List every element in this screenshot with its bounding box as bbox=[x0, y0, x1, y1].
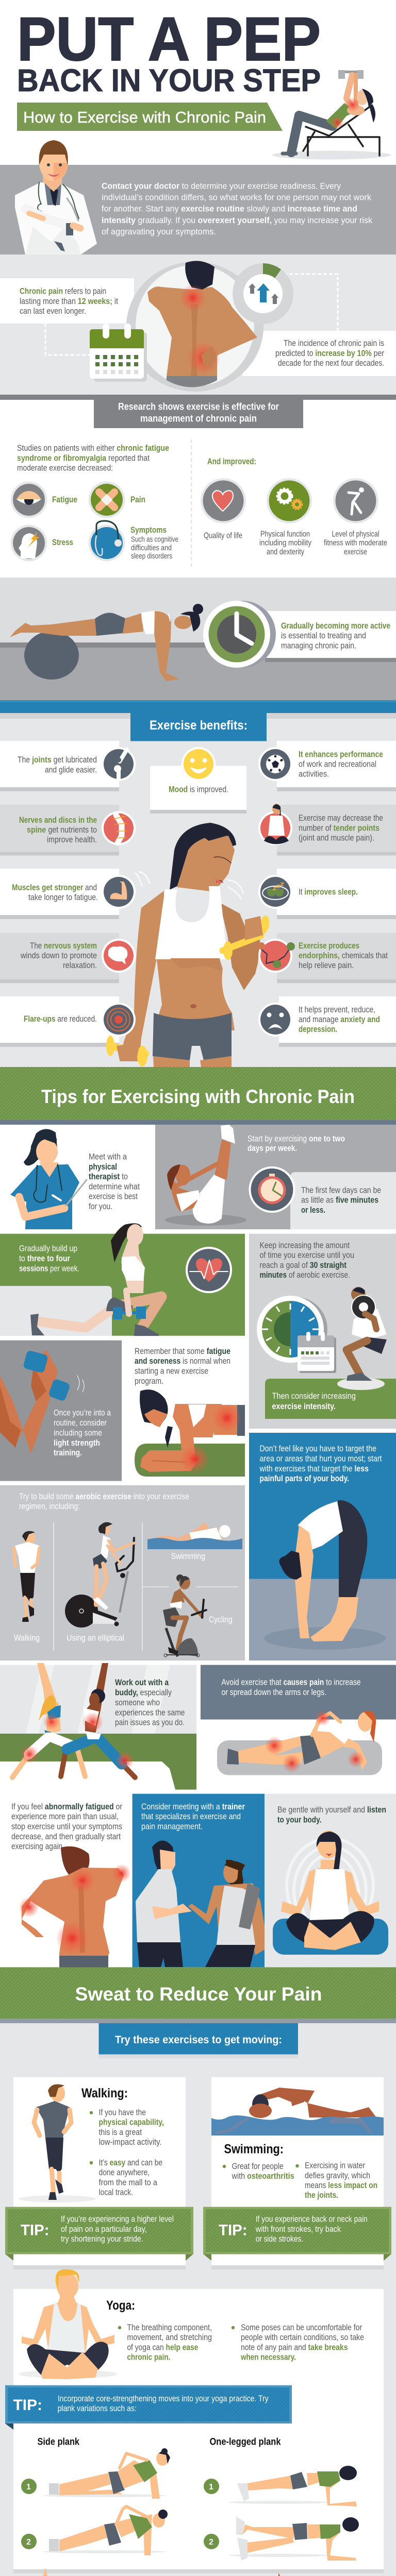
benefit: nerves and discs: Nerves and discs in the bbox=[19, 816, 97, 825]
illustration: squat man with weight bbox=[337, 1287, 387, 1390]
heading: side plank: Side plank bbox=[37, 2437, 79, 2447]
text: buddy: Work out with a bbox=[115, 1678, 169, 1687]
bullet: breathing: The breathing component, bbox=[127, 2323, 212, 2332]
text: aerobic intro: Try to build some aerobic exercise into your exercise bbox=[19, 1492, 189, 1501]
heading: research shows bbox=[94, 400, 303, 428]
text: symptoms: sleep disorders bbox=[131, 552, 172, 561]
label: swimming: Swimming bbox=[171, 1552, 205, 1561]
bullet: physical capability bbox=[90, 2108, 164, 2147]
illustration: swimmer bbox=[147, 1522, 242, 1549]
benefit: nervous system: The nervous system bbox=[30, 941, 97, 951]
benefit: mood bbox=[169, 747, 228, 794]
text: abnormally fatigued: decrease, and then gradually start bbox=[11, 1832, 121, 1841]
benefit: muscles: Muscles get stronger and bbox=[12, 883, 97, 892]
icon: spine bbox=[102, 811, 136, 845]
tip: 30 straight minutes bbox=[249, 1234, 396, 1429]
text: start by exercising bbox=[248, 1134, 345, 1153]
illustration: side plank step 1 bbox=[43, 2448, 170, 2499]
icon: heart bbox=[201, 478, 246, 523]
text: abnormally fatigued: If you feel abnormally fatigued or bbox=[11, 1802, 122, 1811]
text: physical therapist: determine what bbox=[89, 1182, 140, 1191]
illustration: lunge woman bbox=[30, 1223, 161, 1336]
text: remember: Remember that some fatigue bbox=[135, 1347, 230, 1356]
illustration: side plank with pain points bbox=[217, 1710, 382, 1775]
tip banner: swimming: or side strokes. bbox=[256, 2234, 303, 2244]
benefit: anxiety and depression: depression. bbox=[299, 1025, 337, 1034]
benefit: anxiety and depression: It helps prevent, reduce, bbox=[299, 1005, 375, 1014]
icon: soccer ball bbox=[258, 747, 292, 781]
bullet: easy: done anywhere, bbox=[99, 2168, 150, 2177]
text: remember bbox=[135, 1347, 230, 1386]
benefit: flare-ups bbox=[24, 1003, 136, 1037]
icon: stopwatch bbox=[249, 1166, 295, 1213]
text: trainer bbox=[141, 1802, 245, 1831]
tip: light strength training bbox=[0, 1341, 122, 1481]
icon: circle with rising arrows bbox=[233, 263, 293, 324]
text: light strength bbox=[54, 1409, 111, 1458]
icon: flexed arm bbox=[102, 875, 136, 909]
text: physical therapist bbox=[89, 1152, 140, 1211]
bullet: less impact: defies gravity, which bbox=[305, 2171, 370, 2180]
tip banner: walking bbox=[5, 2207, 193, 2261]
icon: heart rate bbox=[186, 1247, 232, 1293]
heading: try these exercises: Try these exercises to get moving: bbox=[115, 2034, 282, 2046]
illustration: woman on incline bench with dumbbells bbox=[272, 70, 391, 160]
subtitle banner: How to Exercise with Chronic Pain bbox=[23, 108, 266, 126]
benefit: endorphins: Exercise produces bbox=[299, 941, 359, 951]
bullet: osteoarthritis bbox=[223, 2162, 294, 2181]
label: level of fitness: Level of physical bbox=[332, 530, 380, 538]
text: avoid bbox=[222, 1677, 361, 1697]
icon: molecule bbox=[258, 939, 295, 973]
step marker: one-legged plank 2 bbox=[204, 2534, 219, 2549]
heading: exercise benefits: Exercise benefits: bbox=[150, 718, 248, 733]
bullet: easy: from the mall to a bbox=[99, 2178, 158, 2187]
icon: brain bbox=[102, 939, 136, 973]
illustration: woman plank on exercise ball bbox=[10, 604, 203, 681]
text: listen to your body bbox=[277, 1805, 386, 1825]
text: symptoms: Such as cognitive bbox=[131, 535, 178, 544]
illustration: woman planking with pain points bbox=[135, 1389, 245, 1477]
text: buddy: pain issues as you do. bbox=[115, 1718, 185, 1727]
benefit: tender points: number of tender points bbox=[299, 823, 380, 833]
text: trainer: that specializes in exercise and bbox=[141, 1812, 241, 1821]
text: chronic pain definition: can last even longer. bbox=[20, 307, 86, 316]
step marker: one-legged plank 1: 1 bbox=[209, 2483, 213, 2492]
label: pain: Pain bbox=[130, 495, 145, 504]
text: don't feel: with exercises that target the less bbox=[259, 1464, 369, 1473]
text: symptoms: Symptoms bbox=[130, 526, 167, 535]
bullet: breathing bbox=[118, 2323, 212, 2362]
text: keep increasing: Keep increasing the amount bbox=[260, 1241, 350, 1250]
benefit: nervous system: winds down to promote bbox=[20, 951, 97, 960]
benefit: anxiety and depression bbox=[258, 1003, 380, 1037]
callout: consider intensity bbox=[265, 1379, 396, 1419]
icon: flare target bbox=[102, 1003, 136, 1037]
tip: work out with a buddy bbox=[0, 1663, 196, 1790]
tip: fatigue and soreness bbox=[135, 1347, 245, 1477]
heading: tips for exercising bbox=[0, 1067, 396, 1125]
text: light strength: routine, consider bbox=[54, 1418, 107, 1428]
tip banner: walking: of pain on a particular day, bbox=[61, 2225, 147, 2234]
benefit: performance: of work and recreational bbox=[299, 760, 376, 769]
text: keep increasing bbox=[260, 1241, 354, 1280]
text: first few days: or less. bbox=[301, 1206, 325, 1215]
icon: calendar bbox=[90, 324, 147, 382]
label: level of fitness: exercise bbox=[344, 548, 367, 556]
benefit: joints: The joints get lubricated bbox=[18, 755, 97, 765]
text: first few days: The first few days can be bbox=[301, 1185, 381, 1195]
text: studies bbox=[17, 444, 169, 473]
text: symptoms bbox=[130, 526, 178, 561]
text: light strength: light strength bbox=[54, 1438, 100, 1448]
card: yoga bbox=[5, 2269, 384, 2573]
label: using an elliptical: Using an elliptical bbox=[67, 1634, 124, 1643]
tip: abnormally fatigued bbox=[11, 1802, 131, 1968]
text: gradually active: is essential to treating and bbox=[281, 631, 366, 640]
bullet: poses: people with certain conditions, so take bbox=[241, 2333, 364, 2342]
text: chronic pain definition bbox=[20, 287, 118, 316]
bullet: easy: local track. bbox=[99, 2188, 133, 2197]
text: trainer: pain management. bbox=[141, 1822, 203, 1831]
text: buddy: experiences the same bbox=[115, 1708, 185, 1718]
icon: fatigue eye bbox=[10, 481, 47, 518]
benefit: nerves and discs: spine get nutrients to bbox=[27, 825, 97, 835]
illustration: trainer and client handshake bbox=[136, 1840, 268, 1967]
text: contact your doctor bbox=[102, 181, 373, 236]
label: physical function: Physical function bbox=[260, 530, 310, 538]
text: gradually active: managing chronic pain. bbox=[281, 641, 356, 650]
panel: gradually more active bbox=[0, 578, 396, 700]
bullet: osteoarthritis: with osteoarthritis bbox=[232, 2172, 294, 2181]
benefit: sleep bbox=[258, 875, 358, 909]
tip banner: yoga: plank variations such as: bbox=[58, 2404, 137, 2413]
text: keep increasing: of time you exercise until you bbox=[260, 1251, 354, 1260]
text: light strength: Once you’re into a bbox=[54, 1409, 111, 1418]
text: physical therapist: exercise is best bbox=[89, 1192, 138, 1201]
benefit: joints bbox=[18, 747, 136, 781]
step marker: one-legged plank 2: 2 bbox=[209, 2538, 213, 2547]
benefit: anxiety and depression: and manage anxiety and bbox=[299, 1015, 380, 1024]
text: start by exercising: Start by exercising one to two bbox=[248, 1134, 345, 1143]
text: studies: Studies on patients with either chronic fatigue bbox=[17, 444, 169, 453]
benefit: endorphins: help relieve pain. bbox=[299, 961, 354, 970]
text: first few days bbox=[301, 1185, 381, 1215]
tip banner: walking: try shortening your stride. bbox=[61, 2234, 143, 2244]
text: three to four bbox=[19, 1244, 79, 1273]
panel: chronic pain facts bbox=[0, 255, 396, 400]
label: stress: Stress bbox=[52, 538, 73, 547]
text: contact your doctor: individual’s condition differs, so what works for one person may not work bbox=[102, 193, 372, 202]
heading: yoga: Yoga: bbox=[106, 2298, 135, 2313]
illustration: man's back with pain points bbox=[19, 1846, 131, 1968]
text: don't feel: painful parts of your body. bbox=[260, 1474, 349, 1483]
text: studies: syndrome or fibromyalgia reported that bbox=[17, 453, 150, 463]
label: fatigue: Fatigue bbox=[52, 495, 77, 504]
bullet: physical capability: this is a great bbox=[99, 2128, 142, 2137]
text: buddy bbox=[115, 1678, 185, 1727]
label: level of fitness bbox=[324, 530, 387, 556]
benefit: performance bbox=[258, 747, 383, 781]
text: studies: moderate exercise decreased: bbox=[17, 464, 113, 473]
bullet: poses: note of any pain and take breaks bbox=[241, 2343, 348, 2352]
illustration: woman with dumbbells bbox=[106, 823, 271, 1067]
card: tai chi bbox=[3, 2568, 193, 2576]
label: cycling: Cycling bbox=[209, 1615, 233, 1624]
panel: and improved bbox=[201, 457, 387, 556]
text: three to four: to three to four bbox=[19, 1254, 70, 1263]
text: physical therapist: for you. bbox=[89, 1202, 112, 1211]
benefit: muscles: take longer to fatigue. bbox=[28, 893, 98, 902]
panel: contact your doctor bbox=[0, 165, 396, 255]
illustration: doctor bbox=[15, 140, 97, 255]
tip: physical therapist bbox=[10, 1129, 140, 1229]
tip banner: walking: TIP: bbox=[21, 2222, 50, 2239]
icon: clock bbox=[203, 601, 276, 668]
title: BACK IN YOUR STEP bbox=[17, 63, 321, 98]
tip: less painful parts bbox=[249, 1433, 396, 1660]
bullet: breathing: movement, and stretching bbox=[127, 2333, 212, 2342]
icon: joint bbox=[102, 747, 136, 781]
illustration: man with back pain in circle bbox=[126, 261, 263, 392]
illustration: pilates V-sit bbox=[219, 2573, 302, 2576]
section background: exercises bbox=[0, 2023, 396, 2576]
text: buddy: buddy, especially bbox=[115, 1688, 172, 1697]
illustration: arm with dumbbell bbox=[0, 1350, 84, 1454]
tip banner: walking: If you’re experiencing a higher level bbox=[61, 2215, 174, 2224]
text: contact your doctor: intensity gradually. If you overexert yourself, you may increase your risk bbox=[102, 216, 373, 225]
benefit: sleep: It improves sleep. bbox=[299, 888, 358, 897]
text: physical therapist: Meet with a bbox=[89, 1152, 127, 1161]
bullet: easy: It’s easy and can be bbox=[99, 2158, 162, 2167]
tip banner: yoga: TIP: bbox=[13, 2397, 42, 2414]
icon: sad face bbox=[258, 1003, 292, 1037]
text: don't feel: Don’t feel like you have to target the bbox=[260, 1444, 376, 1453]
text: buddy: someone who bbox=[115, 1698, 160, 1707]
benefit: endorphins bbox=[258, 939, 388, 973]
text: abnormally fatigued: experience more pain than usual, bbox=[11, 1812, 119, 1821]
text: physical therapist: physical bbox=[89, 1162, 117, 1172]
illustration: warrior pose woman bbox=[3, 2568, 120, 2576]
panel: aerobic exercise bbox=[0, 1485, 245, 1660]
text: listen to your body: Be gentle with yourself and listen bbox=[277, 1805, 386, 1815]
benefit: nerves and discs: improve health. bbox=[47, 835, 97, 844]
label: quality of life: Quality of life bbox=[204, 532, 242, 540]
benefit: nervous system: relaxation. bbox=[63, 961, 97, 970]
benefit: endorphins: endorphins, chemicals that bbox=[299, 951, 388, 960]
title: PUT A PEP bbox=[17, 5, 321, 74]
text: listen to your body: to your body. bbox=[277, 1816, 322, 1825]
benefit: mood: Mood is improved. bbox=[169, 785, 228, 794]
panel: studies decreased bbox=[10, 444, 178, 562]
step marker: side plank 1 bbox=[21, 2479, 37, 2494]
illustration: swimmer bbox=[211, 2088, 384, 2136]
bullet: breathing: of yoga can help ease bbox=[127, 2343, 198, 2352]
step marker: side plank 1: 1 bbox=[26, 2483, 31, 2492]
icon: half-hour clock bbox=[257, 1296, 327, 1363]
text: aerobic intro bbox=[19, 1492, 189, 1511]
text: physical therapist: therapist to bbox=[89, 1172, 128, 1181]
text: abnormally fatigued: exercising again. bbox=[11, 1842, 64, 1851]
text: first few days: as little as five minutes bbox=[301, 1196, 378, 1205]
bullet: physical capability: physical capability, bbox=[99, 2118, 164, 2127]
text: avoid: or spread down the arms or legs. bbox=[222, 1688, 326, 1697]
illustration: forward fold woman bbox=[279, 1500, 367, 1641]
benefit: tender points: (joint and muscle pain). bbox=[299, 834, 374, 843]
text: abnormally fatigued: stop exercise until your symptoms bbox=[11, 1822, 122, 1831]
text: chronic pain definition: Chronic pain refers to pain bbox=[20, 287, 106, 296]
illustration: walking man bbox=[14, 1531, 39, 1622]
text: contact your doctor: for another. Start any exercise routine slowly and increase time and bbox=[102, 205, 357, 214]
illustration: walking man bbox=[19, 2084, 96, 2202]
label: physical function bbox=[259, 530, 311, 556]
text: incidence bbox=[275, 339, 384, 368]
section: exercise benefits bbox=[0, 700, 396, 1067]
bullet: less impact: Exercising in water bbox=[305, 2161, 365, 2170]
bullet: physical capability: If you have the bbox=[99, 2108, 146, 2117]
callout: consider intensity: exercise intensity. bbox=[272, 1402, 336, 1411]
illustration: one-legged plank step 2 bbox=[228, 2517, 359, 2561]
bullet: less impact: means less impact on bbox=[305, 2181, 377, 2190]
icon: stress head bbox=[10, 524, 47, 562]
icon: stretching figure bbox=[333, 478, 378, 523]
bullet: poses: Some poses can be uncomfortable for bbox=[241, 2323, 362, 2332]
bullet: poses bbox=[232, 2323, 364, 2362]
tip: meet with a trainer bbox=[133, 1794, 268, 1967]
heading: and improved: And improved: bbox=[207, 457, 256, 466]
tip: avoid exercise that causes pain bbox=[201, 1665, 396, 1775]
step marker: side plank 2 bbox=[21, 2534, 37, 2549]
bullet: breathing: chronic pain. bbox=[127, 2353, 170, 2362]
card: swimming bbox=[203, 2077, 391, 2269]
illustration: woman on stationary bike bbox=[163, 1574, 206, 1657]
text: chronic pain definition: lasting more than 12 weeks; it bbox=[20, 297, 118, 306]
text: contact your doctor: Contact your doctor to determine your exercise readiness. Every bbox=[102, 181, 341, 191]
heading: tips for exercising: Tips for Exercising with Chronic Pain bbox=[41, 1086, 355, 1107]
bullet: less impact bbox=[295, 2161, 377, 2200]
heading: walking: Walking: bbox=[81, 2086, 128, 2100]
step marker: one-legged plank 1 bbox=[204, 2479, 219, 2494]
icon: calendar small bbox=[298, 1332, 336, 1373]
icon: pain bandage bbox=[89, 481, 125, 518]
benefit: performance: activities. bbox=[299, 770, 329, 779]
text: start by exercising: days per week. bbox=[248, 1144, 297, 1153]
heading: exercise benefits bbox=[130, 713, 267, 741]
benefit: flare-ups: Flare-ups are reduced. bbox=[24, 1014, 97, 1024]
tip banner: yoga: Incorporate core-strengthening moves into your yoga practice. Try bbox=[58, 2394, 269, 2403]
text: remember: starting a new exercise bbox=[135, 1366, 208, 1376]
subtitle banner bbox=[17, 103, 283, 131]
bullet: easy bbox=[90, 2158, 162, 2197]
illustration: V-sit woman bbox=[167, 1125, 235, 1224]
tip: be gentle bbox=[265, 1794, 396, 1967]
text: aerobic intro: regimen, including: bbox=[19, 1502, 80, 1511]
benefit: tender points bbox=[258, 804, 383, 845]
text: light strength: training. bbox=[54, 1448, 82, 1458]
text: avoid: Avoid exercise that causes pain to increase bbox=[222, 1677, 361, 1687]
bullet: less impact: the joints. bbox=[305, 2191, 338, 2200]
benefit: nervous system bbox=[20, 939, 136, 973]
illustration: woman on elliptical bbox=[65, 1522, 134, 1628]
text: remember: and soreness is normal when bbox=[135, 1357, 230, 1366]
text: keep increasing: reach a goal of 30 straight bbox=[260, 1261, 346, 1270]
illustration: side plank step 2 bbox=[43, 2506, 168, 2555]
illustration: nurse bbox=[10, 1129, 87, 1229]
icon: sleep mask bbox=[258, 875, 292, 909]
card: pilates bbox=[203, 2573, 391, 2576]
tip: start slowly bbox=[155, 1125, 396, 1229]
tip: three to four sessions bbox=[0, 1223, 245, 1336]
heading: try these exercises bbox=[99, 2023, 298, 2059]
tip banner: swimming: If you experience back or neck pain bbox=[256, 2215, 368, 2224]
card: walking bbox=[5, 2077, 193, 2269]
text: symptoms: difficulties and bbox=[131, 544, 172, 552]
heading: sweat to reduce your pain bbox=[0, 1967, 396, 2023]
text: remember: program. bbox=[135, 1377, 163, 1386]
illustration: yoga woman bbox=[19, 2269, 118, 2379]
text: keep increasing: minutes of aerobic exercise. bbox=[260, 1270, 350, 1280]
text: light strength: including some bbox=[54, 1428, 102, 1437]
icon: meditating woman bbox=[258, 804, 292, 845]
tip banner: yoga bbox=[5, 2385, 292, 2430]
text: abnormally fatigued bbox=[11, 1802, 122, 1851]
callout: consider intensity: Then consider increasing bbox=[272, 1392, 356, 1401]
bullet: osteoarthritis: Great for people bbox=[232, 2162, 284, 2171]
text: gradually active bbox=[281, 621, 390, 650]
text: three to four: sessions per week. bbox=[19, 1264, 79, 1273]
heading: sweat to reduce your pain: Sweat to Reduce Your Pain bbox=[75, 1984, 322, 2005]
icon: gears bbox=[267, 478, 312, 523]
text: contact your doctor: of aggravating your symptoms. bbox=[102, 227, 216, 236]
tip banner: swimming: TIP: bbox=[219, 2222, 248, 2239]
label: physical function: and dexterity bbox=[267, 548, 304, 556]
heading: swimming: Swimming: bbox=[224, 2142, 284, 2157]
heading: research shows: management of chronic pain bbox=[140, 413, 257, 425]
heading: research shows: Research shows exercise is effective for bbox=[118, 401, 279, 412]
step marker: side plank 2: 2 bbox=[26, 2538, 31, 2547]
icon: symptoms stethoscope bbox=[89, 521, 125, 562]
text: incidence: predicted to increase by 10% per bbox=[275, 349, 384, 358]
label: physical function: including mobility bbox=[259, 539, 311, 548]
bullet: physical capability: low-impact activity. bbox=[99, 2138, 162, 2147]
bullet: poses: when necessary. bbox=[240, 2353, 296, 2362]
benefit: muscles bbox=[12, 875, 136, 909]
tip banner: swimming: with front strokes, try back bbox=[255, 2225, 341, 2234]
text: trainer: Consider meeting with a trainer bbox=[141, 1802, 245, 1811]
text: don't feel bbox=[259, 1444, 382, 1483]
illustration: meditating woman with halo bbox=[273, 1831, 388, 1955]
illustration: one-legged plank step 1 bbox=[228, 2466, 357, 2506]
text: three to four: Gradually build up bbox=[19, 1244, 77, 1253]
heading: one-legged plank: One-legged plank bbox=[209, 2437, 281, 2447]
illustration: two women stretching with pain points bbox=[12, 1663, 135, 1777]
tip banner: swimming bbox=[203, 2207, 391, 2261]
benefit: joints: and glide easier. bbox=[45, 766, 97, 775]
label: walking: Walking bbox=[14, 1634, 40, 1643]
benefit: nerves and discs bbox=[19, 811, 136, 845]
